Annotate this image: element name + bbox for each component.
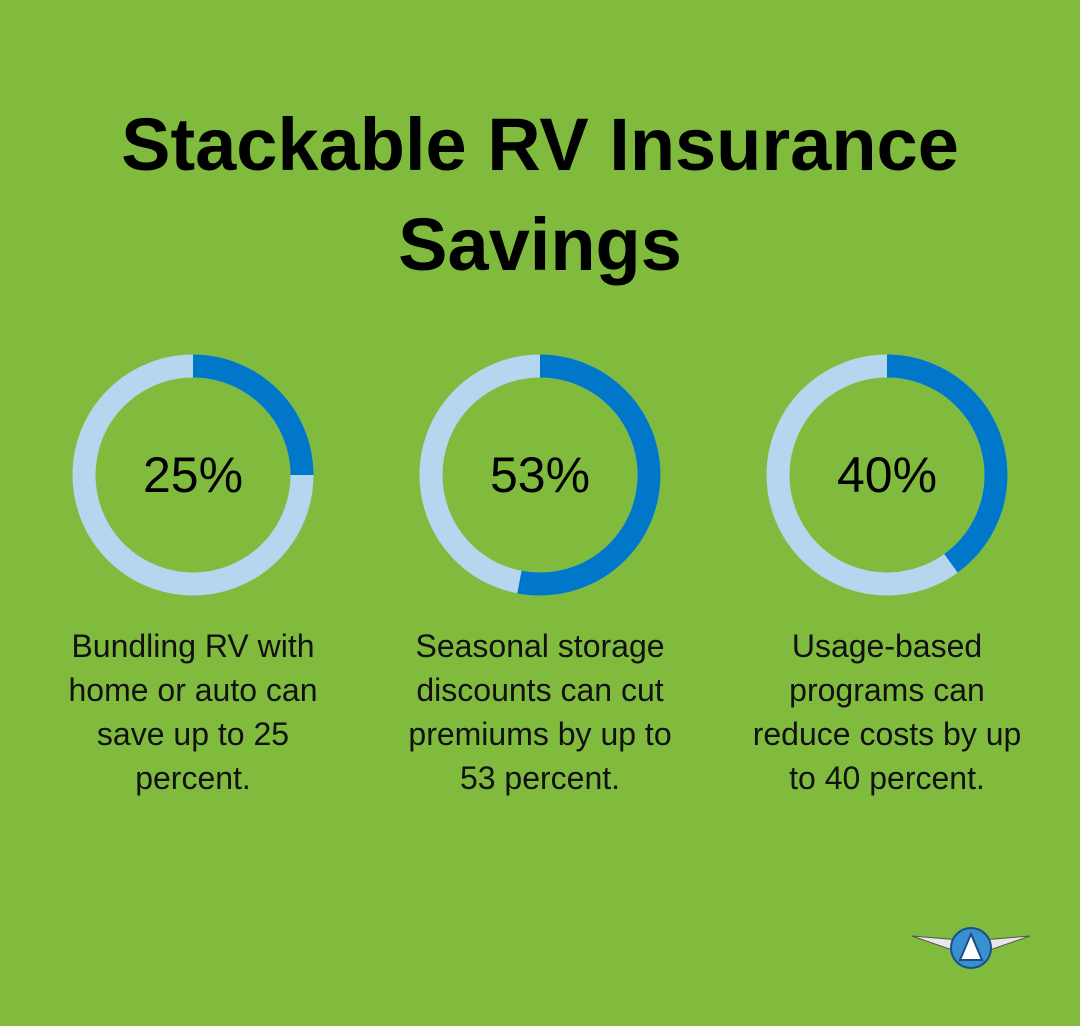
text: seasonal storage: Seasonal storage xyxy=(415,628,665,664)
chart: 53% donut: 53% xyxy=(490,447,590,503)
chart: 25% donut xyxy=(72,354,314,596)
text: bundling: home or auto can xyxy=(68,672,318,708)
text: seasonal storage: premiums by up to xyxy=(408,716,672,752)
text: seasonal storage xyxy=(408,628,672,796)
text: seasonal storage: 53 percent. xyxy=(460,760,620,796)
text: usage-based: Usage-based xyxy=(792,628,982,664)
text: usage-based: to 40 percent. xyxy=(789,760,985,796)
text: usage-based: programs can xyxy=(789,672,985,708)
icon: logo xyxy=(912,927,1030,969)
text: bundling: Bundling RV with xyxy=(71,628,315,664)
title: Savings xyxy=(398,203,682,286)
chart: 25% donut: 25% xyxy=(143,447,243,503)
chart: 40% donut xyxy=(766,354,1008,596)
text: bundling xyxy=(68,628,318,796)
text: seasonal storage: discounts can cut xyxy=(416,672,664,708)
text: usage-based: reduce costs by up xyxy=(753,716,1021,752)
chart: 53% donut xyxy=(420,354,660,596)
title: Stackable RV Insurance xyxy=(121,103,959,186)
text: bundling: save up to 25 xyxy=(97,716,289,752)
chart: 40% donut: 40% xyxy=(837,447,937,503)
text: bundling: percent. xyxy=(135,760,251,796)
title xyxy=(121,103,959,286)
text: usage-based xyxy=(753,628,1021,796)
